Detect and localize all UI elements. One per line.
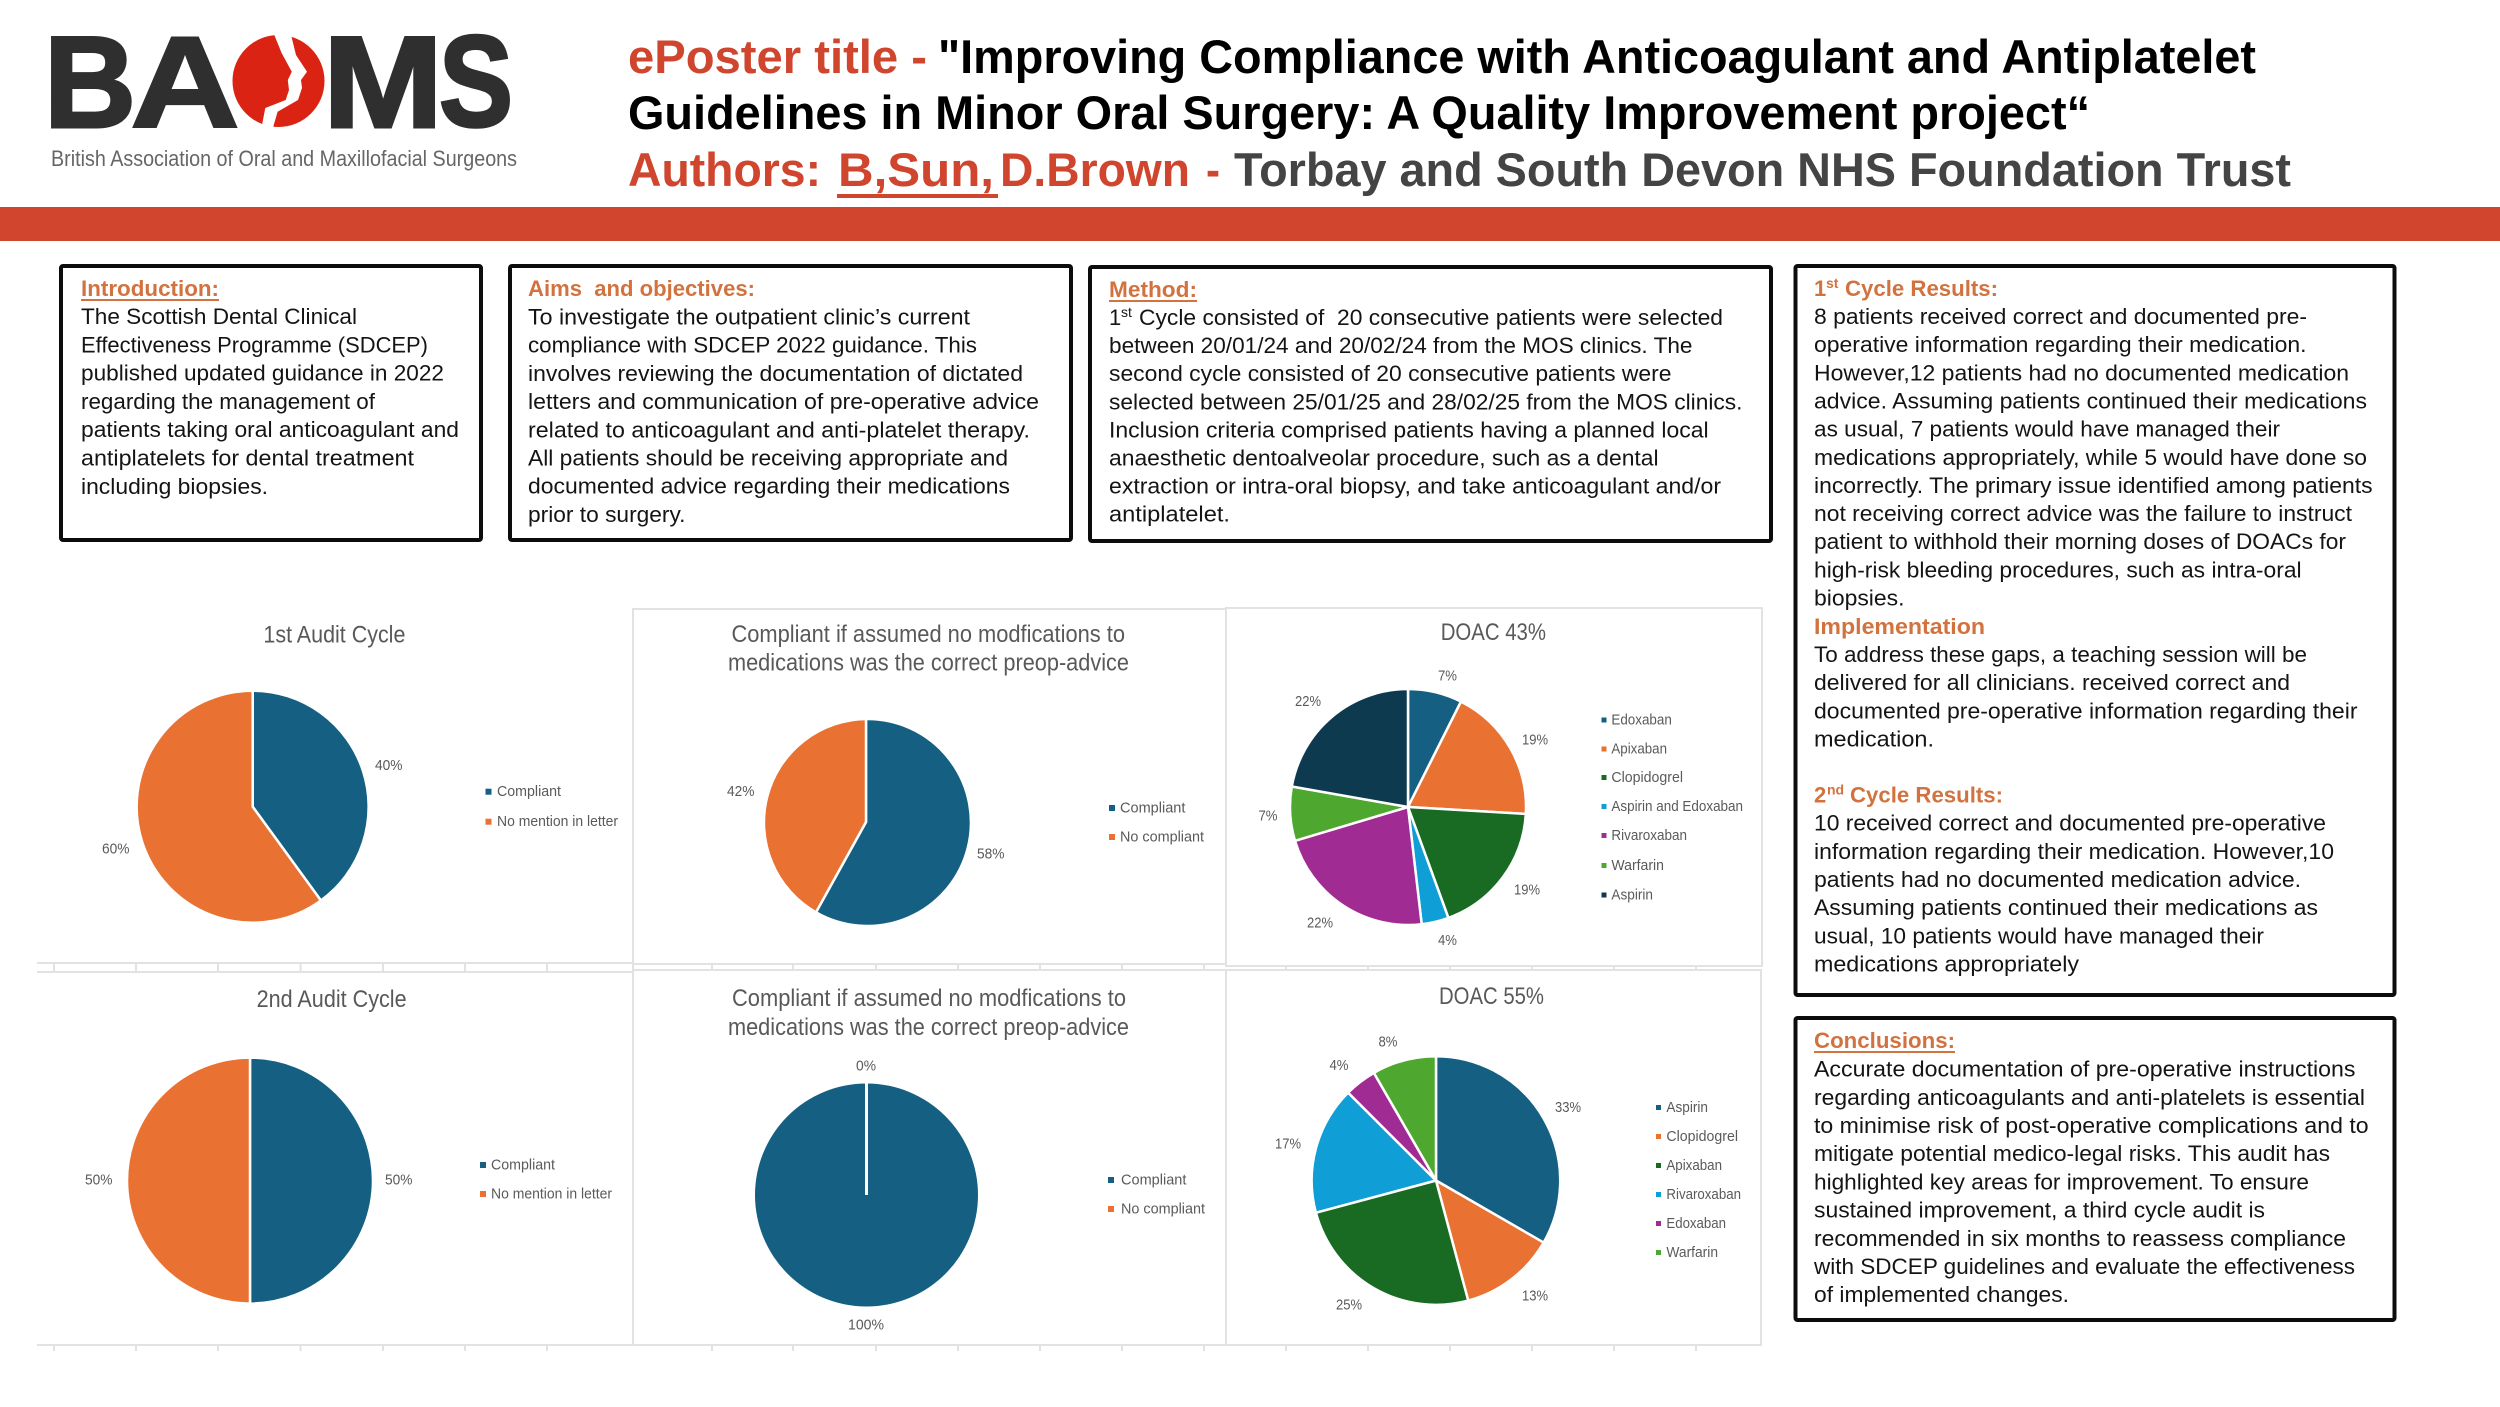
chart: DOAC 55% pie: 13% [1522,1288,1548,1304]
chart: DOAC 43% pie: Rivaroxaban [1611,827,1687,844]
chart: 1st audit cycle pie: No mention in letter [497,813,618,830]
title block: Guidelines in Minor Oral Surgery: A Quality Improvement project“ [628,86,2090,139]
text: implementation body: To address these gaps, a teaching session will be [1814,642,2307,667]
text: conclusions body: highlighted key areas for improvement. To ensure [1814,1169,2309,1194]
text: method body: between 20/01/24 and 20/02/24 from the MOS clinics. The [1109,333,1692,358]
logo: BAOMS: B [44,9,136,155]
heading: method: Method: [1109,277,1197,302]
chart: 2nd audit cycle pie: Compliant [491,1156,556,1174]
chart: compliant if no modifications, cycle 1: Compliant [1120,800,1186,816]
chart: compliant if no modifications, cycle 1: medications was the correct preop-advice [728,650,1129,677]
text: 1st cycle results body: high-risk bleeding procedures, such as intra-oral [1814,557,2302,582]
text: conclusions body: regarding anticoagulants and anti-platelets is essential [1814,1085,2365,1110]
chart: 2nd audit cycle pie: 2nd Audit Cycle [257,986,407,1013]
chart: 1st audit cycle pie: 40% [375,757,402,774]
chart: compliant if no modifications, cycle 1 [633,609,1226,964]
text: method body: second cycle consisted of 20 consecutive patients were [1109,361,1672,386]
chart: compliant if no modifications, cycle 1: 42% [727,783,754,800]
chart: DOAC 43% pie [1226,608,1762,966]
text: implementation body: delivered for all clinicians. received correct and [1814,670,2290,695]
chart: compliant if no modifications, cycle 2 [633,970,1226,1345]
chart: DOAC 55% pie: 25% [1336,1296,1362,1314]
text: conclusions body: with SDCEP guidelines and evaluate the effectiveness [1813,1254,2355,1279]
text: aims body: compliance with SDCEP 2022 guidance. This [528,333,977,358]
logo: BAOMS: S [439,8,513,154]
text: method body: antiplatelet. [1109,502,1230,527]
text: conclusions body: sustained improvement, a third cycle audit is [1814,1198,2265,1223]
text: introduction body [81,304,459,499]
chart: DOAC 43% pie: DOAC 43% [1441,619,1546,646]
text: introduction body: antiplatelets for dental treatment [81,446,414,470]
chart: DOAC 43% pie: 7% [1258,808,1278,824]
chart: DOAC 55% pie: 8% [1378,1034,1398,1050]
title block: Authors: [628,143,821,196]
chart: compliant if no modifications, cycle 2: Compliant [1121,1172,1187,1188]
chart: DOAC 55% pie [1226,970,1761,1345]
chart: DOAC 55% pie: Rivaroxaban [1666,1186,1741,1203]
text: implementation body [1814,642,2358,752]
text: introduction body: published updated guidance in 2022 [81,361,444,386]
text: conclusions body: to minimise risk of post-operative complications and to [1814,1113,2369,1138]
logo: BAOMS: M [323,9,443,155]
text: conclusions body: mitigate potential medico-legal risks. This audit has [1814,1141,2330,1166]
text: 2nd cycle results body: Assuming patients continued their medications as [1814,895,2318,920]
logo: BAOMS: A [130,9,240,155]
chart: compliant if no modifications, cycle 2: 0% [856,1058,876,1074]
chart: DOAC 43% pie: 19% [1514,882,1540,898]
chart: DOAC 43% pie: 4% [1438,932,1457,949]
chart: DOAC 55% pie: Aspirin [1666,1099,1708,1116]
text: 1st cycle results body [1814,304,2373,610]
text: method body: selected between 25/01/25 and 28/02/25 from the MOS clinics. [1109,389,1742,414]
text: implementation body: documented pre-operative information regarding their [1814,698,2358,723]
panel: results [1796,266,2394,995]
title block: D.Brown [1000,143,1190,196]
chart: 1st audit cycle pie: Compliant [497,783,562,800]
panel: conclusions [1796,1018,2394,1320]
chart: compliant if no modifications, cycle 1: No compliant [1120,828,1205,846]
text: 1st cycle results body: medications appropriately, while 5 would have done so [1814,445,2367,470]
chart: DOAC 43% pie: 19% [1522,732,1548,748]
header red bar [0,207,2500,241]
text: introduction body: including biopsies. [81,474,268,499]
text: 1st cycle results body: incorrectly. The primary issue identified among patients [1814,473,2373,498]
chart: 1st audit cycle pie: 60% [102,840,130,858]
title block: "Improving Compliance with Anticoagulant and Antiplatelet [938,30,2256,83]
chart: compliant if no modifications, cycle 2: 100% [848,1316,884,1334]
text: 2nd cycle results body: medications appropriately [1814,952,2079,976]
title block: B,Sun, [838,143,994,196]
text: 2nd cycle results body: information regarding their medication. However,10 [1814,839,2334,864]
chart: 2nd audit cycle pie: No mention in letter [491,1186,612,1202]
heading: conclusions: Conclusions: [1814,1028,1955,1053]
chart: DOAC 43% pie: 22% [1307,914,1333,932]
text: aims body: involves reviewing the documentation of dictated [528,361,1023,386]
logo: BAOMS: British Association of Oral and Maxillofacial Surgeons [51,146,517,171]
text: method body: Cycle consisted of 20 consecutive patients were selected [1139,305,1723,330]
chart: DOAC 43% pie: 7% [1438,668,1457,684]
text: 1st cycle results body: However,12 patients had no documented medication [1814,360,2349,385]
chart: compliant if no modifications, cycle 2: medications was the correct preop-advice [728,1014,1129,1041]
text: 1st cycle results body: 8 patients received correct and documented pre- [1814,304,2307,329]
chart: 2nd audit cycle pie [85,986,612,1304]
text: introduction body: Effectiveness Programme (SDCEP) [81,332,428,357]
text: 1st cycle results body: patient to withhold their morning doses of DOACs for [1814,529,2346,554]
chart: DOAC 55% pie: DOAC 55% [1439,983,1544,1010]
title block: Torbay and South Devon NHS Foundation Trust [1234,143,2291,196]
chart: DOAC 55% pie: 17% [1275,1136,1301,1152]
chart: DOAC 43% pie: Apixaban [1611,740,1667,758]
chart: DOAC 43% pie: Warfarin [1611,857,1664,874]
chart: 2nd audit cycle pie: 50% [85,1172,112,1188]
heading: 1st cycle results: 1 [1814,276,1826,301]
chart: DOAC 55% pie: Warfarin [1666,1244,1718,1261]
text: 1st cycle results body: as usual, 7 patients would have managed their [1814,417,2280,442]
heading: implementation: Implementation [1814,614,1985,639]
chart: 2nd audit cycle pie: 50% [385,1172,412,1188]
text: method body: 1 [1109,305,1121,330]
text: introduction body: The Scottish Dental Clinical [81,304,357,329]
chart: DOAC 55% pie: Edoxaban [1666,1215,1726,1232]
chart: 1st audit cycle pie: 1st Audit Cycle [263,622,405,649]
text: conclusions body: Accurate documentation of pre-operative instructions [1814,1057,2356,1082]
chart: DOAC 55% pie: 4% [1330,1057,1348,1074]
panel: method [1090,267,1771,541]
title block [628,30,2291,198]
text: 1st cycle results body: biopsies. [1814,586,1904,610]
chart: DOAC 43% pie: Aspirin and Edoxaban [1611,798,1743,815]
text: aims body: related to anticoagulant and anti-platelet therapy. [528,417,1030,442]
heading: 1st cycle results: Cycle Results: [1845,276,1998,301]
title block: ePoster title - [628,30,927,83]
text: method body: st [1121,304,1132,320]
chart: DOAC 55% pie: Apixaban [1666,1157,1722,1174]
text: aims body: To investigate the outpatient clinic’s current [528,304,970,330]
heading: introduction: Introduction: [81,276,219,301]
logo: BAOMS [44,8,517,171]
text: 2nd cycle results body [1814,811,2334,976]
text: 1st cycle results body: advice. Assuming patients continued their medications [1814,388,2367,414]
chart: DOAC 55% pie: Clopidogrel [1666,1128,1738,1145]
chart: compliant if no modifications, cycle 2: No compliant [1121,1200,1206,1218]
chart: compliant if no modifications, cycle 2: Compliant if assumed no modfications to [732,985,1126,1012]
text: 2nd cycle results body: usual, 10 patients would have managed their [1814,923,2264,948]
text: introduction body: patients taking oral anticoagulant and [81,417,459,442]
title block: - [1206,143,1220,196]
heading: 1st cycle results: st [1826,275,1839,291]
chart: DOAC 43% pie: Edoxaban [1611,712,1672,728]
text: aims body: documented advice regarding their medications [528,474,1010,499]
text: method body: extraction or intra-oral biopsy, and take anticoagulant and/or [1109,474,1721,499]
text: conclusions body: recommended in six months to reassess compliance [1814,1226,2346,1251]
chart: DOAC 43% pie: Aspirin [1611,886,1653,904]
text: method body: Inclusion criteria comprised patients having a planned local [1109,417,1709,442]
text: 2nd cycle results body: 10 received correct and documented pre-operative [1814,811,2326,836]
chart: compliant if no modifications, cycle 1: 58% [977,846,1004,862]
chart: 1st audit cycle pie [102,622,618,923]
heading: aims and objectives: Aims and objectives: [528,276,755,301]
text: conclusions body: of implemented changes. [1814,1282,2069,1307]
text: conclusions body [1813,1057,2369,1307]
text: 1st cycle results body: operative information regarding their medication. [1814,332,2306,357]
text: 2nd cycle results body: patients had no documented medication advice. [1814,867,2301,892]
text: aims body [528,304,1039,527]
chart: DOAC 43% pie: Clopidogrel [1611,769,1683,786]
text: 1st cycle results body: not receiving correct advice was the failure to instruct [1814,501,2352,526]
chart: DOAC 43% pie: 22% [1295,693,1321,710]
panel: aims and objectives [510,266,1071,540]
heading: 2nd cycle results: nd [1827,782,1844,798]
text: implementation body: medication. [1814,726,1934,752]
heading: 2nd cycle results: 2 [1814,783,1826,808]
text: aims body: prior to surgery. [528,502,686,527]
panel: introduction [61,266,481,540]
heading: 2nd cycle results: Cycle Results: [1850,783,2003,808]
text: method body: anaesthetic dentoalveolar procedure, such as a dental [1109,446,1659,470]
chart: compliant if no modifications, cycle 1: Compliant if assumed no modfications to [732,621,1125,648]
chart: DOAC 55% pie: 33% [1555,1099,1581,1116]
text: aims body: letters and communication of pre-operative advice [528,389,1039,414]
text: method body [1109,304,1742,527]
text: aims body: All patients should be receiving appropriate and [528,446,1008,470]
text: introduction body: regarding the management of [81,389,376,414]
